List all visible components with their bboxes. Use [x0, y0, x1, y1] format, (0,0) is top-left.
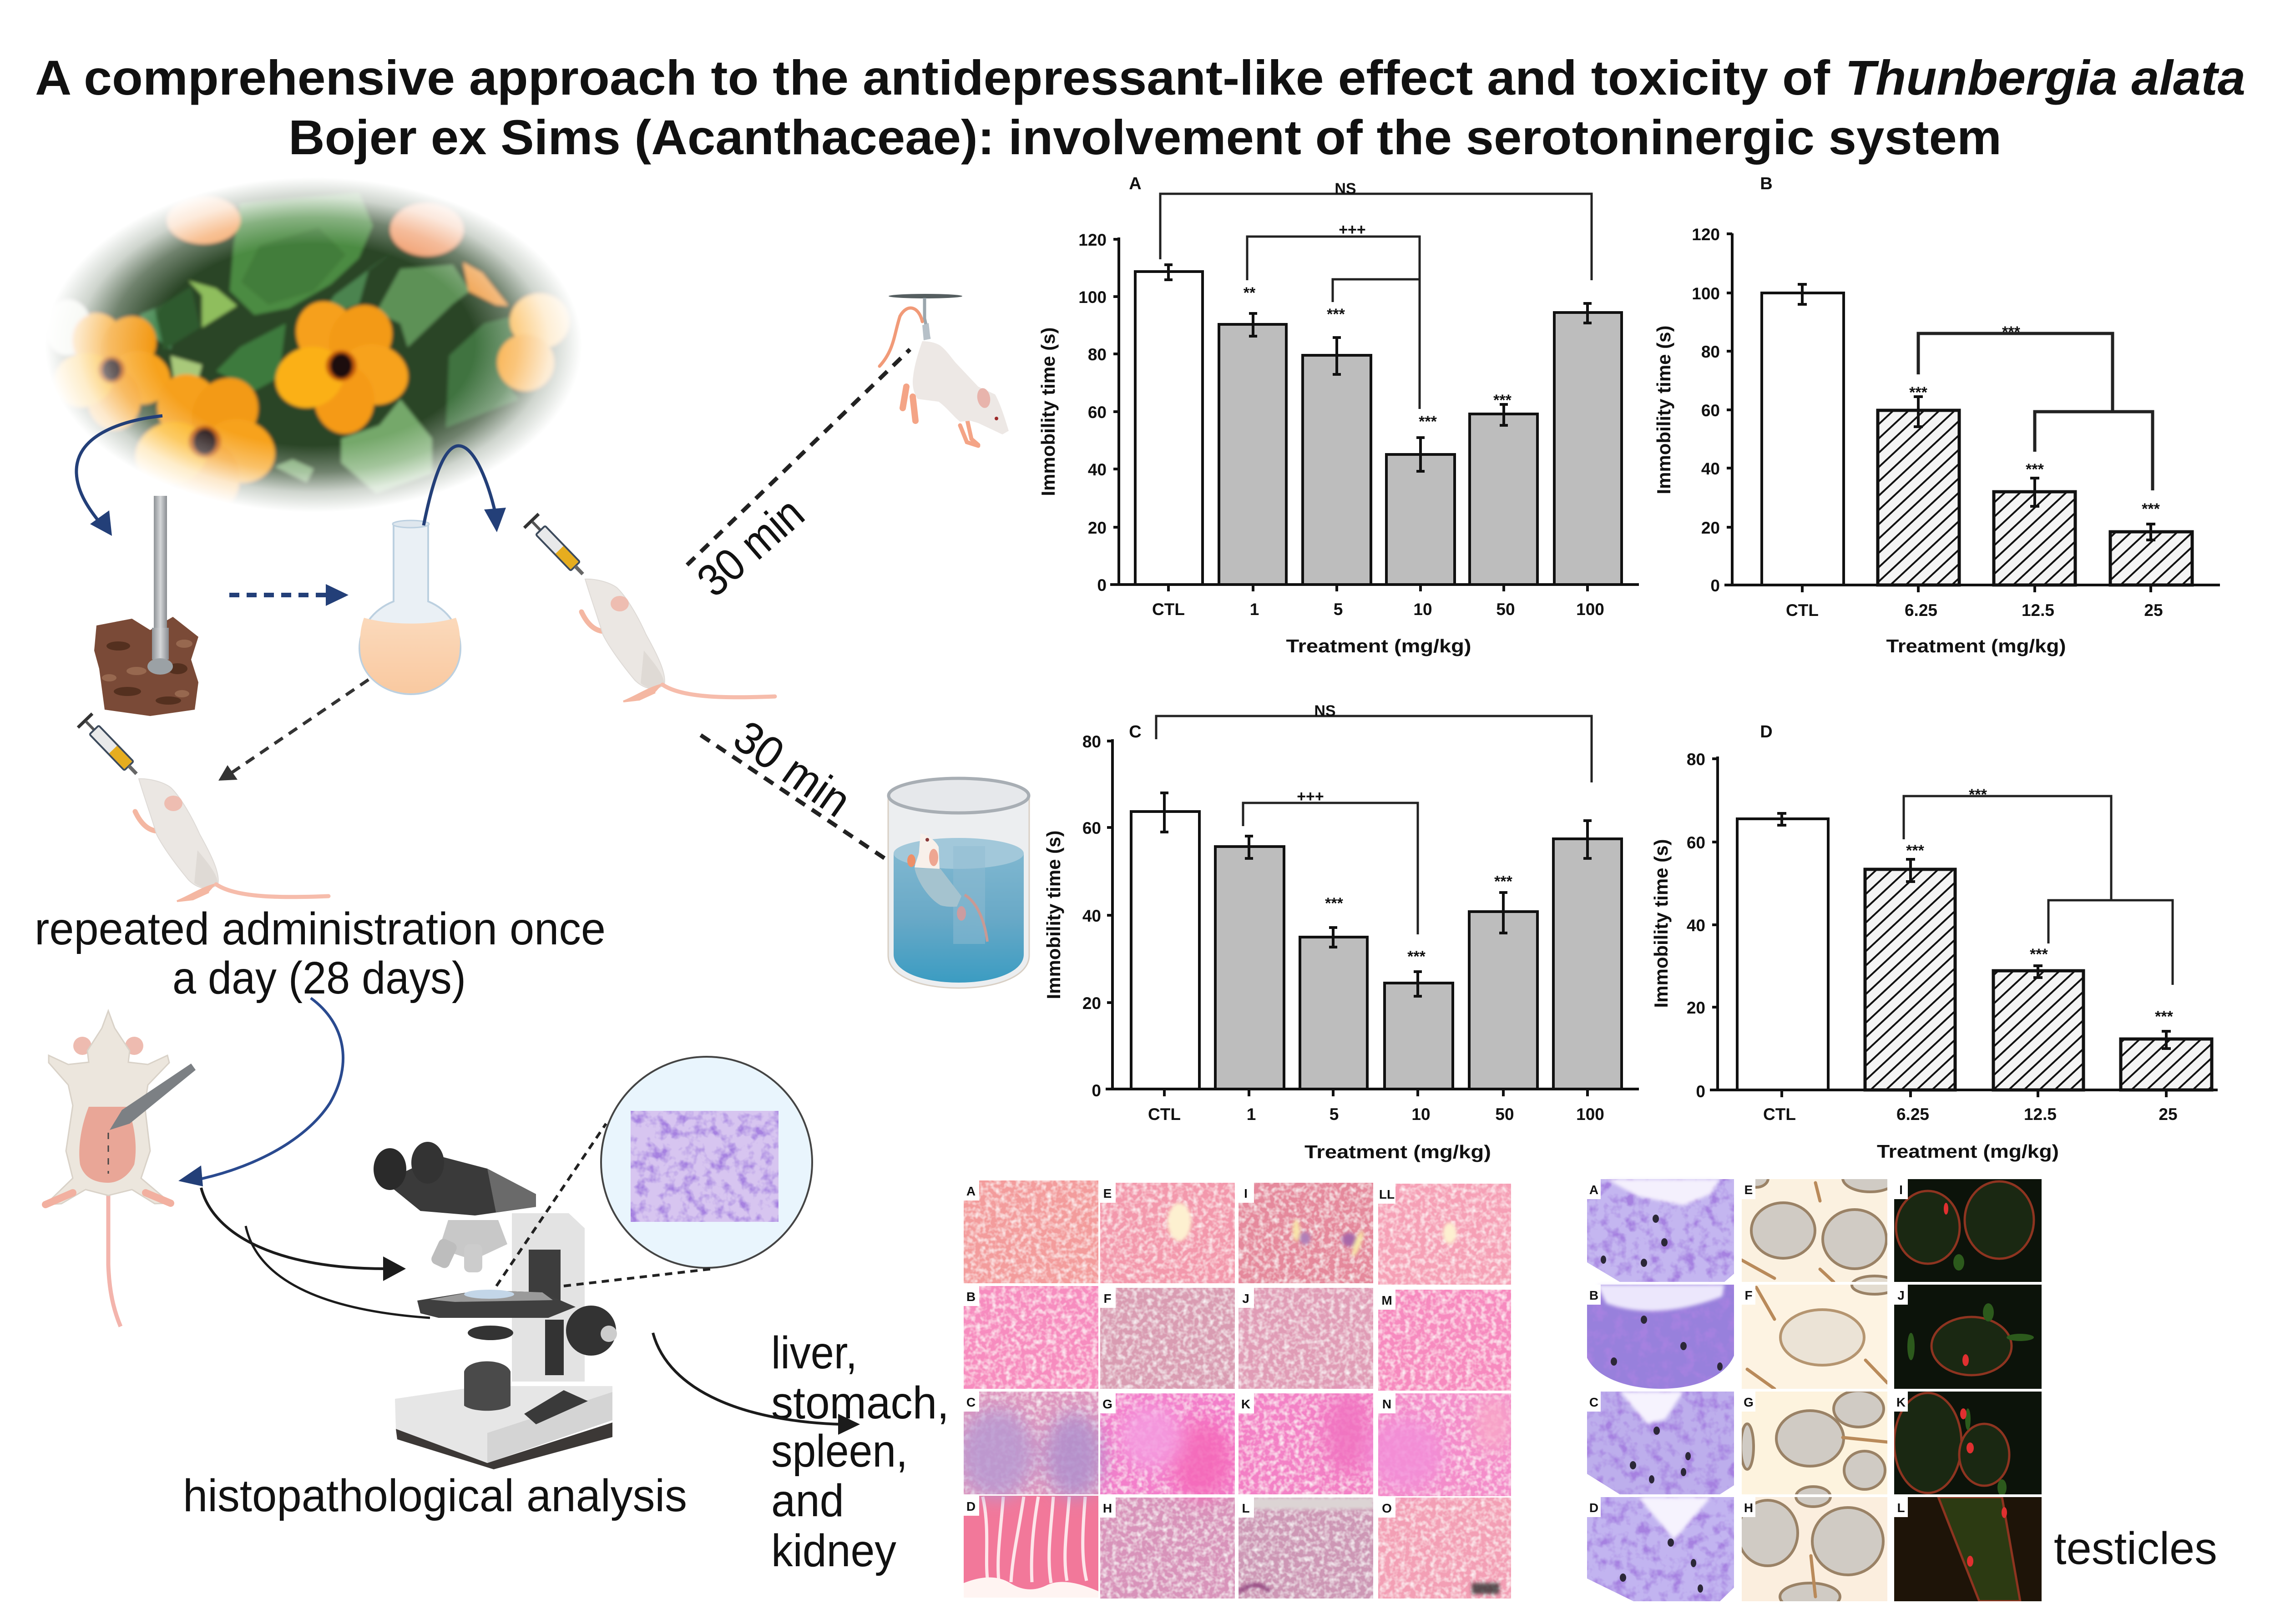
y axis title: Immobility time (s): [1653, 325, 1674, 494]
microscope head and eyepieces: [374, 1142, 536, 1215]
panel letters: C: [966, 1395, 976, 1409]
tissue base panels: [964, 1180, 1511, 1599]
significance labels: **: [1244, 284, 1256, 302]
chart D: forced swim, extract fraction: [1650, 722, 2218, 1162]
significance labels: +++: [1297, 788, 1324, 805]
error bars: [1164, 265, 1592, 471]
error bars: [1160, 793, 1592, 996]
arrow: flask to treated mouse: [424, 446, 506, 532]
significance labels: ***: [2142, 500, 2160, 518]
bars: [1762, 293, 2192, 585]
icon: tail suspension test mouse: [880, 294, 1009, 446]
icon: dissected rat with scalpel: [46, 1011, 196, 1326]
arrow: microscope to organ micrographs: [653, 1333, 860, 1435]
significance labels: ***: [2155, 1008, 2174, 1025]
significance brackets: [1156, 716, 1592, 934]
panel letters: K: [1241, 1397, 1250, 1411]
objectives: [430, 1220, 507, 1272]
panel letters: N: [1382, 1397, 1391, 1411]
panel letters: [964, 1180, 1395, 1518]
chart A: tail suspension, immobility time: [1037, 174, 1639, 656]
panel letters: L: [1897, 1501, 1905, 1515]
x tick labels: 12.5: [2024, 1105, 2057, 1124]
arrow: rat to microscope stage, lower: [246, 1226, 430, 1318]
y tick labels: 40: [1088, 460, 1107, 479]
micrograph grid: testicles, cresyl violet column: [1587, 1179, 1734, 1601]
label: organs: kidney: [771, 1525, 896, 1576]
panel letters: LL: [1379, 1187, 1395, 1201]
significance labels: [1909, 323, 2160, 518]
x tick labels: 1: [1250, 600, 1259, 619]
x tick labels: CTL: [1152, 600, 1185, 619]
label: testicles: testicles: [2054, 1523, 2217, 1574]
significance labels: ***: [1494, 873, 1513, 890]
significance brackets: [1904, 796, 2173, 985]
stained cell nuclei: [1601, 1215, 1723, 1593]
panel letters: H: [1103, 1501, 1112, 1515]
panel letters: B: [966, 1290, 976, 1304]
significance labels: [1244, 180, 1512, 430]
panel letters: L: [1242, 1501, 1250, 1515]
x tick labels: [1763, 1105, 2178, 1124]
error bars: [1777, 813, 2171, 1049]
significance labels: [1297, 702, 1513, 965]
x tick labels: 10: [1413, 600, 1432, 619]
x axis title: Treatment (mg/kg): [1286, 635, 1471, 656]
x tick labels: CTL: [1148, 1105, 1181, 1124]
significance labels: ***: [1493, 392, 1512, 409]
dashed zoom lines from microscope to magnified view: [496, 1124, 713, 1286]
axes: [1106, 739, 1639, 1096]
y tick labels: [1687, 750, 1705, 1101]
significance labels: NS: [1314, 702, 1336, 720]
arrow: dashed, flask to repeated dosing mouse: [218, 680, 369, 781]
axes: [1110, 237, 1639, 591]
label: organs: stomach,: [771, 1377, 949, 1428]
micrograph grid: testicles, fluorescence column: [1894, 1179, 2042, 1601]
panel letters: J: [1242, 1291, 1249, 1306]
y tick labels: 120: [1078, 231, 1107, 249]
label: repeated administration: [35, 903, 606, 1004]
y tick labels: 60: [1687, 833, 1705, 852]
y tick labels: [1078, 231, 1107, 595]
microscope stage: [417, 1290, 576, 1318]
y tick labels: 40: [1701, 459, 1720, 478]
icon: mouse with oral gavage syringe (acute): [523, 513, 775, 701]
bars: [1135, 272, 1622, 585]
panel letters: D: [966, 1499, 976, 1513]
icon: pestle in crushed plant material: [94, 496, 198, 716]
panel letters: I: [1899, 1183, 1903, 1197]
panel letters: A: [1589, 1183, 1598, 1197]
error bars: [1798, 284, 2155, 540]
microscope base: [395, 1386, 612, 1469]
icon: round-bottom flask with extract: [359, 520, 460, 694]
y tick labels: 100: [1078, 288, 1107, 307]
x tick labels: 5: [1334, 600, 1343, 619]
x tick labels: 50: [1495, 1105, 1514, 1124]
panel letters: J: [1897, 1288, 1905, 1302]
panel letters: C: [1589, 1395, 1598, 1409]
panel letters: G: [1102, 1397, 1112, 1411]
stomach panel with gland stripes: [964, 1496, 1098, 1598]
x tick labels: [1148, 1105, 1604, 1124]
x axis title: Treatment (mg/kg): [1877, 1141, 2059, 1162]
x tick labels: 25: [2144, 601, 2163, 620]
x tick labels: 25: [2159, 1105, 2178, 1124]
microscope arm: [464, 1213, 585, 1411]
panel letters: F: [1103, 1291, 1112, 1306]
arrow: rat to microscope, upper: [201, 1188, 406, 1281]
y tick labels: 0: [1097, 576, 1107, 595]
arrow: dashed, pestle to flask: [229, 584, 349, 606]
significance labels: ***: [1327, 306, 1345, 323]
x tick labels: 100: [1576, 600, 1604, 619]
plant photo: Thunbergia alata flowers: [50, 181, 577, 509]
chart C: forced swim, immobility time: [1043, 702, 1639, 1162]
title: Bojer ex Sims (Acanthaceae): involvement of the serotoninergic system: [288, 110, 2002, 165]
label: repeated administration: a day (28 days): [172, 953, 466, 1004]
panel letters: H: [1744, 1501, 1753, 1515]
panel letters: E: [1103, 1186, 1112, 1200]
panel letters: B: [1589, 1288, 1598, 1302]
x tick labels: 1: [1247, 1105, 1256, 1124]
x tick labels: 6.25: [1905, 601, 1937, 620]
y tick labels: 20: [1082, 994, 1101, 1013]
significance labels: ***: [1325, 895, 1344, 912]
y tick labels: 80: [1088, 345, 1107, 364]
x tick labels: [1786, 601, 2163, 620]
magnified view of tissue: [601, 1057, 812, 1268]
panel letters: M: [1381, 1293, 1392, 1307]
y tick labels: 80: [1687, 750, 1705, 769]
y tick labels: [1692, 225, 1720, 595]
micrograph grid: testicles, immunostained tubules column: [1742, 1179, 1887, 1601]
significance labels: ***: [2026, 461, 2044, 478]
y tick labels: 40: [1687, 916, 1705, 935]
dashed line and label: 30 min to tail suspension: [687, 349, 910, 606]
dashed line and label: 30 min to tail suspension: 30 min: [688, 488, 814, 606]
axes: [1710, 757, 2218, 1097]
label: repeated administration: repeated administration once: [35, 903, 606, 954]
significance labels: NS: [1335, 180, 1356, 197]
x axis title: Treatment (mg/kg): [1886, 635, 2066, 656]
x tick labels: 10: [1411, 1105, 1431, 1124]
x tick labels: [1152, 600, 1604, 619]
axes: [1724, 233, 2220, 592]
panel letter: A: [1129, 174, 1142, 193]
label: organs: spleen,: [771, 1426, 908, 1477]
significance labels: ***: [1906, 842, 1925, 859]
bars: [1737, 819, 2212, 1090]
x tick labels: CTL: [1763, 1105, 1796, 1124]
significance labels: ***: [2030, 946, 2048, 963]
significance labels: ***: [1969, 786, 1987, 803]
panel letter: D: [1760, 722, 1773, 741]
y axis title: Immobility time (s): [1650, 839, 1672, 1008]
title: Thunbergia alata: [1845, 50, 2245, 105]
y tick labels: 0: [1092, 1081, 1101, 1100]
x tick labels: 5: [1330, 1105, 1339, 1124]
x tick labels: CTL: [1786, 601, 1819, 620]
y tick labels: 60: [1082, 819, 1101, 837]
panel letter: B: [1760, 174, 1773, 193]
label: organs: and: [771, 1475, 844, 1526]
panel letters: A: [966, 1184, 976, 1198]
panel letters: [1742, 1179, 1755, 1517]
panel letters: [1894, 1179, 1908, 1517]
x tick labels: 6.25: [1896, 1105, 1929, 1124]
x tick labels: 50: [1496, 600, 1515, 619]
title: A comprehensive approach to the antidepressant-like effect and toxicity of: [35, 50, 1830, 105]
label: histopathological analysis: histopathological analysis: [183, 1470, 687, 1521]
label: organs: liver,: [771, 1327, 857, 1378]
dashed line and label: 30 min to forced swim: 30 min: [725, 711, 860, 827]
significance labels: ***: [1909, 384, 1928, 401]
y tick labels: 60: [1701, 401, 1720, 420]
significance labels: [1906, 786, 2174, 1025]
panel letters: K: [1896, 1395, 1906, 1409]
panel letters: G: [1744, 1395, 1754, 1409]
y tick labels: 0: [1696, 1082, 1705, 1101]
icon: forced swim test beaker with mouse: [888, 778, 1029, 988]
y axis title: Immobility time (s): [1043, 830, 1064, 999]
significance brackets: [1160, 194, 1592, 409]
icon: microscope: [374, 1142, 617, 1469]
micrograph grid: liver, stomach, spleen, kidney: [958, 1180, 1511, 1599]
panel letters: F: [1744, 1288, 1753, 1302]
panel letters: O: [1382, 1501, 1392, 1515]
significance labels: ***: [1407, 948, 1426, 965]
panel letters: [1587, 1179, 1601, 1517]
y tick labels: 0: [1710, 576, 1720, 595]
title: [35, 50, 2245, 165]
significance brackets: [1918, 333, 2153, 490]
icon: mouse with oral gavage syringe (repeated): [77, 712, 329, 901]
x axis title: Treatment (mg/kg): [1304, 1141, 1491, 1162]
y tick labels: 20: [1687, 999, 1705, 1017]
significance labels: +++: [1339, 221, 1366, 238]
focus knob: [566, 1306, 617, 1356]
y tick labels: 120: [1692, 225, 1720, 244]
y tick labels: 100: [1692, 284, 1720, 303]
x tick labels: 100: [1576, 1105, 1604, 1124]
x tick labels: 12.5: [2022, 601, 2054, 620]
label: organs: [771, 1327, 949, 1576]
chart B: tail suspension, extract fraction: [1653, 174, 2220, 656]
vessels and tissue features: [958, 1203, 1511, 1594]
arrow: plant to grinding: [76, 416, 162, 536]
y axis title: Immobility time (s): [1037, 327, 1059, 496]
y tick labels: [1082, 732, 1101, 1100]
panel letter: C: [1129, 722, 1142, 741]
panel letters: D: [1589, 1501, 1598, 1515]
arrow: repeated administration to dissected rat: [178, 998, 343, 1186]
y tick labels: 40: [1082, 907, 1101, 925]
significance labels: ***: [2002, 323, 2021, 341]
panel letters: I: [1244, 1186, 1248, 1200]
y tick labels: 60: [1088, 403, 1107, 422]
significance labels: ***: [1419, 413, 1437, 430]
dashed line and label: 30 min to forced swim: [701, 711, 894, 864]
y tick labels: 20: [1701, 519, 1720, 537]
bars: [1131, 812, 1622, 1089]
y tick labels: 80: [1701, 343, 1720, 361]
y tick labels: 20: [1088, 519, 1107, 537]
panel letters: E: [1744, 1183, 1753, 1197]
y tick labels: 80: [1082, 732, 1101, 751]
